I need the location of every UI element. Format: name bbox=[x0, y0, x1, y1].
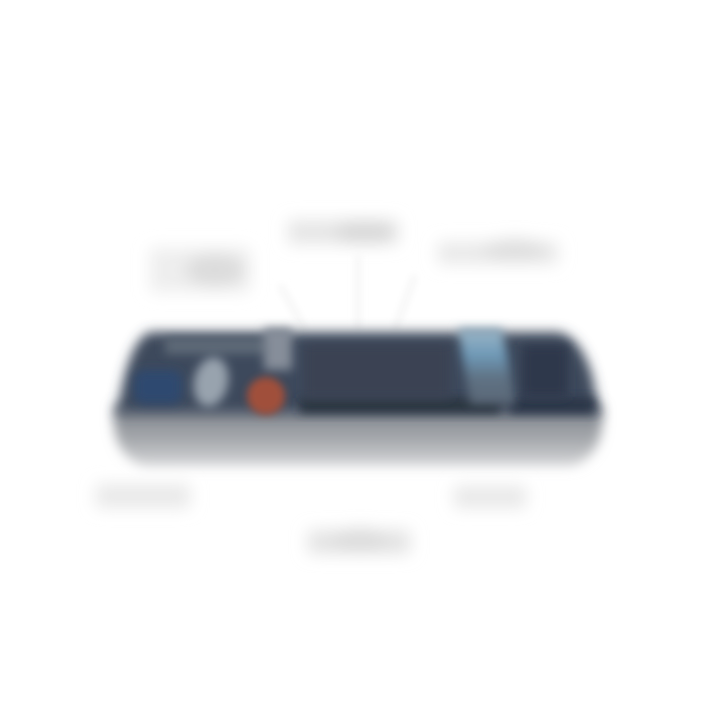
device: hardware panel bbox=[114, 328, 602, 466]
label: bottom left callout (illegible) bbox=[96, 484, 190, 508]
leader lines: top callouts bbox=[280, 255, 415, 330]
device body bbox=[116, 332, 600, 414]
device: light blue indicator and grey lower panel bbox=[458, 328, 516, 404]
device: blue button bbox=[134, 370, 182, 404]
label: top left callout (illegible) bbox=[150, 248, 250, 292]
label: top right callout (illegible) bbox=[438, 239, 558, 264]
label: bottom centre callout (illegible) bbox=[308, 528, 410, 554]
device lower band bbox=[300, 398, 594, 413]
label: top centre callout (illegible) bbox=[288, 220, 398, 244]
device: red button bbox=[247, 377, 285, 415]
leader lines: bottom callouts bbox=[343, 465, 347, 525]
label: bottom right callout (illegible) bbox=[454, 486, 526, 508]
device: vertical grey strip bbox=[264, 328, 292, 370]
device: central screen bbox=[304, 344, 450, 398]
device: left top grey band bbox=[165, 338, 270, 354]
device base and shadow bbox=[114, 405, 602, 466]
device: grey oval control bbox=[189, 354, 233, 410]
device: right dark panel bbox=[522, 345, 568, 397]
